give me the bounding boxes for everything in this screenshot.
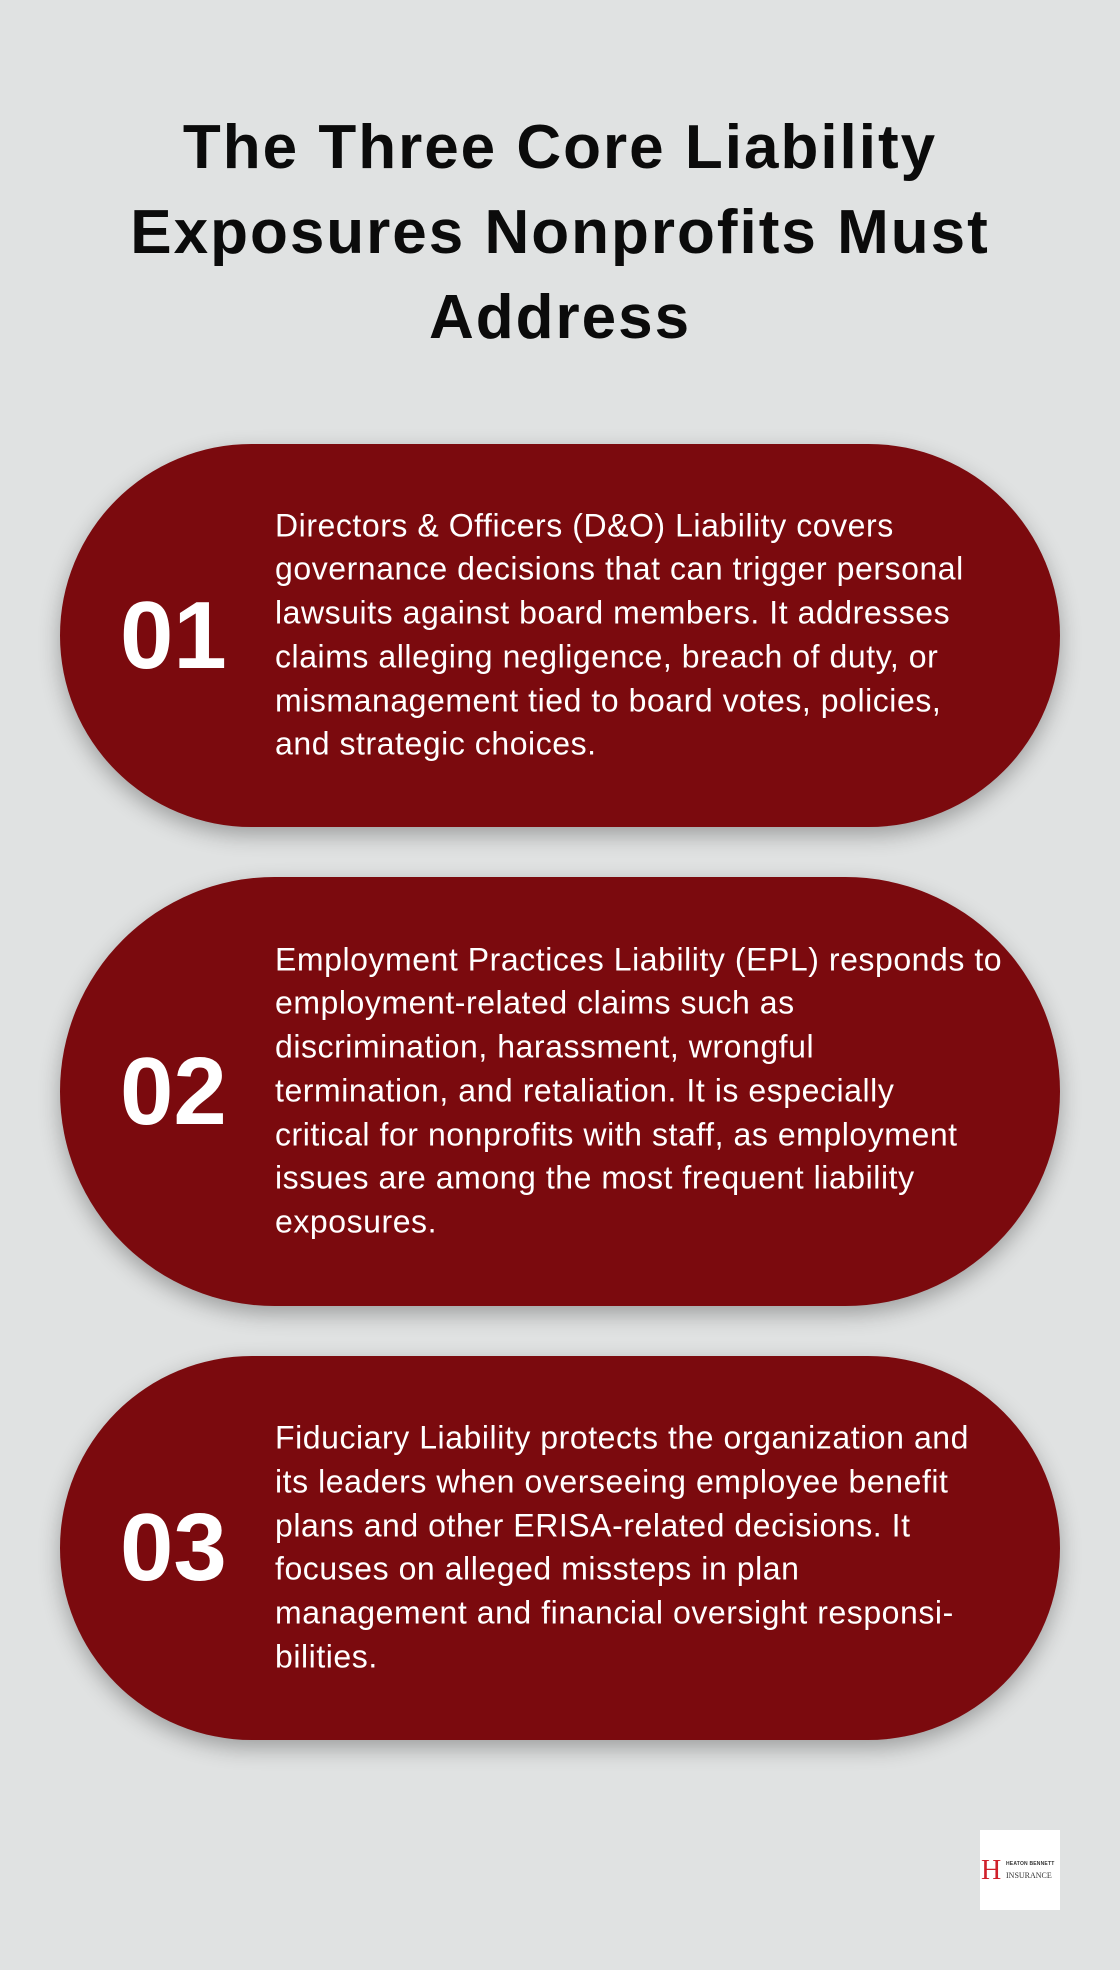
text: fiduciary: its leaders when overseeing employee benefit (275, 1463, 948, 1499)
text: D&O (275, 507, 964, 762)
text: fiduciary: management and financial oversight responsi- (275, 1595, 954, 1631)
number 02: 02 (120, 1038, 227, 1144)
title: Address (429, 283, 691, 352)
number 03: 03 (120, 1494, 227, 1601)
text: D&O: mismanagement tied to board votes, policies, (275, 682, 941, 718)
text: EPL: termination, and retaliation. It is especially (275, 1073, 894, 1109)
text: D&O: claims alleging negligence, breach of duty, or (275, 638, 938, 674)
logo: HEATON BENNETT (1006, 1861, 1054, 1867)
panel: card 02 (60, 877, 1060, 1306)
text: D&O: Directors & Officers (D&O) Liability covers (275, 507, 894, 543)
logo: H (981, 1855, 1001, 1886)
text: EPL: critical for nonprofits with staff, as employment (275, 1116, 958, 1152)
panel: card 01 (60, 444, 1060, 827)
text: D&O: governance decisions that can trigger personal (275, 551, 964, 587)
title: The Three Core Liability (183, 113, 937, 182)
text: fiduciary (275, 1420, 969, 1675)
text: EPL: Employment Practices Liability (EPL) responds to (275, 941, 1002, 977)
text: fiduciary: bilities. (275, 1639, 378, 1675)
text: EPL: employment-related claims such as (275, 985, 795, 1021)
logo: INSURANCE (1006, 1871, 1052, 1880)
number 01: 01 (120, 582, 227, 688)
text: fiduciary: plans and other ERISA-related decisions. It (275, 1507, 911, 1543)
text: EPL: discrimination, harassment, wrongful (275, 1029, 814, 1065)
text: D&O: and strategic choices. (275, 726, 597, 762)
title: Exposures Nonprofits Must (130, 198, 990, 267)
panel: card 03 (60, 1356, 1060, 1740)
text: fiduciary: focuses on alleged missteps in plan (275, 1551, 799, 1587)
text: D&O: lawsuits against board members. It addresses (275, 595, 950, 631)
title (130, 113, 990, 352)
text: EPL: exposures. (275, 1204, 437, 1240)
text: fiduciary: Fiduciary Liability protects the organization and (275, 1420, 969, 1456)
text: EPL (275, 941, 1002, 1240)
text: EPL: issues are among the most frequent liability (275, 1160, 915, 1196)
logo (980, 1830, 1060, 1910)
